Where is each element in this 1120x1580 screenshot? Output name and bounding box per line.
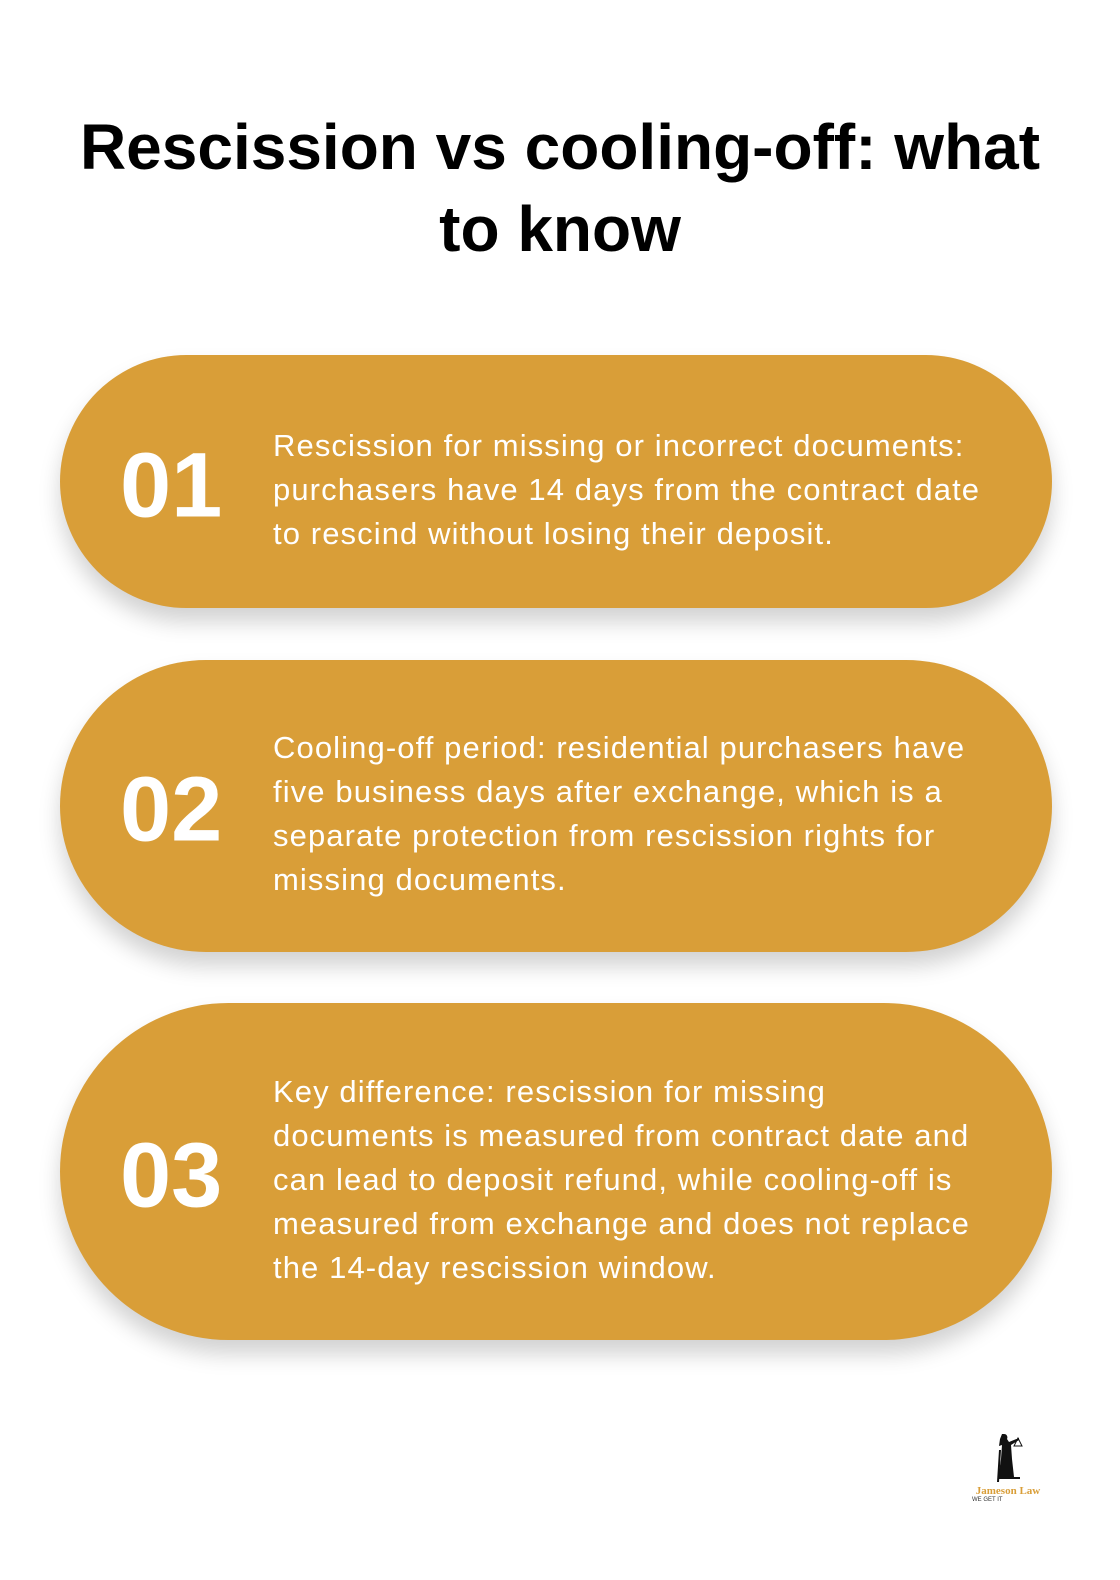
text 01: to rescind without losing their deposit.	[273, 516, 834, 550]
number 03: 03	[120, 1124, 222, 1226]
panel: 01	[60, 355, 1052, 608]
text 03: measured from exchange and does not replace	[273, 1206, 970, 1240]
text 03: documents is measured from contract date and	[273, 1118, 969, 1152]
text 03: the 14-day rescission window.	[273, 1250, 717, 1284]
text 02	[273, 730, 965, 897]
logo text: Jameson Law	[976, 1485, 1040, 1497]
title: to know	[439, 193, 681, 265]
logo: WE GET IT	[972, 1497, 1003, 1503]
text 01: Rescission for missing or incorrect documents:	[273, 428, 964, 462]
logo	[972, 1434, 1040, 1503]
text 02: missing documents.	[273, 862, 567, 897]
text 02: Cooling-off period: residential purchasers have	[273, 730, 965, 765]
text 03: Key difference: rescission for missing	[273, 1074, 826, 1108]
text 03	[273, 1074, 970, 1284]
text 03: can lead to deposit refund, while cooling-off is	[273, 1162, 953, 1196]
text 02: separate protection from rescission rights for	[273, 818, 935, 853]
text 01: purchasers have 14 days from the contract date	[273, 472, 980, 506]
text 01	[273, 428, 980, 550]
number 02: 02	[120, 759, 222, 861]
title	[80, 111, 1040, 265]
panel: 02	[60, 660, 1052, 952]
number 01: 01	[120, 434, 222, 536]
title: Rescission vs cooling-off: what	[80, 111, 1040, 183]
text 02: five business days after exchange, which is a	[273, 774, 943, 809]
panel: 03	[60, 1003, 1052, 1340]
icon: lady justice	[997, 1434, 1023, 1482]
